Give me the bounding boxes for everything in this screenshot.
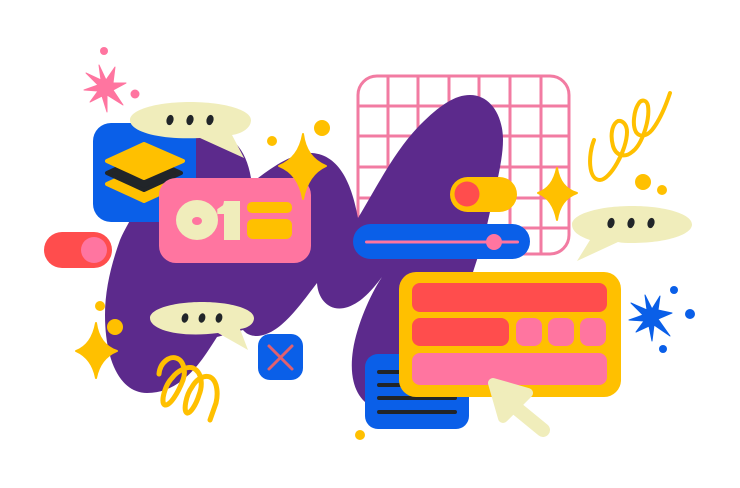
blue close button xyxy=(258,334,303,380)
purple blob background xyxy=(105,95,503,402)
speech bubble right xyxy=(572,206,692,261)
blue slider xyxy=(353,224,530,259)
illustration xyxy=(44,47,695,440)
number 01: 1 xyxy=(214,193,241,249)
pink grid panel xyxy=(358,76,569,254)
yellow squiggle bottom left xyxy=(159,358,217,420)
pink number card xyxy=(159,178,311,263)
blue document card xyxy=(365,354,469,429)
yellow sparkle lower left xyxy=(76,323,117,378)
number 01: 0 xyxy=(182,194,212,250)
pink starburst xyxy=(84,47,140,112)
yellow dots near sparkle xyxy=(267,120,330,146)
speech bubble lower left xyxy=(150,302,254,350)
yellow toggle xyxy=(450,177,517,212)
yellow squiggle top right xyxy=(590,93,670,180)
yellow dot bottom xyxy=(355,430,365,440)
speech bubble top left xyxy=(130,102,251,158)
yellow sparkle right xyxy=(538,168,577,220)
blue layers card xyxy=(93,123,196,222)
yellow layout card xyxy=(399,272,621,397)
cursor arrow xyxy=(493,383,543,430)
red toggle xyxy=(44,232,112,268)
icon: stacked layers xyxy=(107,144,183,201)
blue starburst xyxy=(629,286,695,353)
yellow dots lower left xyxy=(95,301,123,335)
number 01 xyxy=(176,200,240,240)
yellow dots right xyxy=(635,174,667,195)
yellow sparkle centre xyxy=(279,134,326,199)
